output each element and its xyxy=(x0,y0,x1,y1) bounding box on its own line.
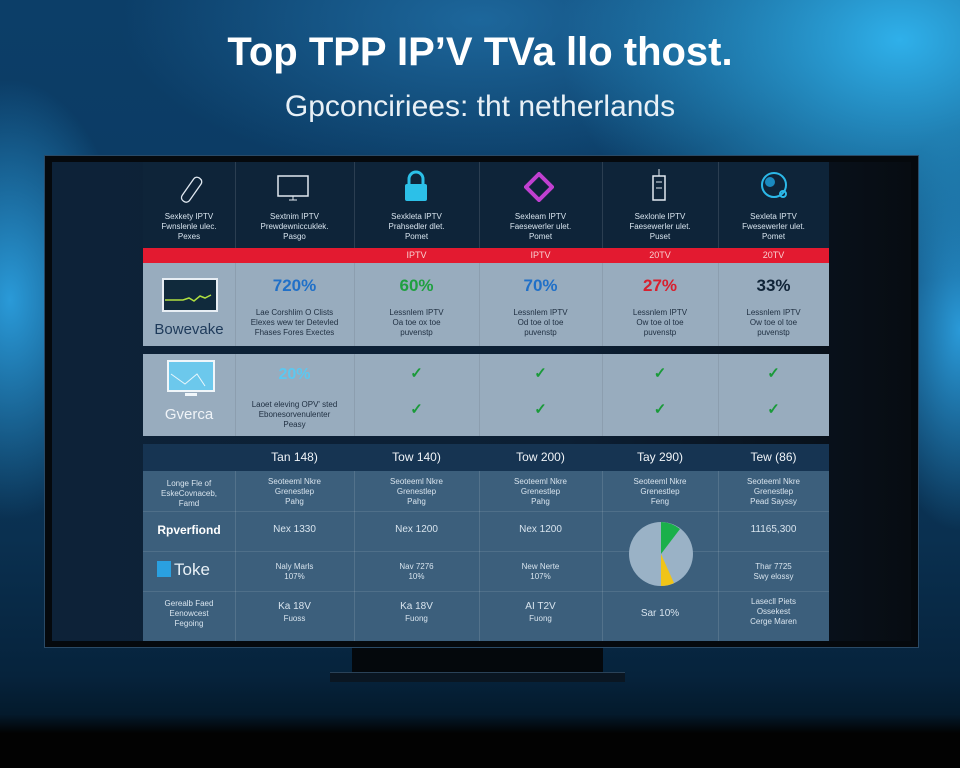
detail rows: 10% xyxy=(408,572,424,581)
header row: Pomet xyxy=(762,232,785,241)
header row: Sexleta IPTV xyxy=(750,212,797,221)
logo: Toke xyxy=(157,560,210,579)
stats row: puvenstp xyxy=(524,328,557,337)
check marks: ✓ xyxy=(534,401,547,418)
detail rows: Fuong xyxy=(529,614,552,623)
icon: monitor xyxy=(277,175,309,200)
stats row: Oa toe ox toe xyxy=(392,318,441,327)
detail rows: Pahg xyxy=(285,497,304,506)
stats row: puvenstp xyxy=(644,328,676,337)
detail rows: Pahg xyxy=(531,497,550,506)
stats row: 720% xyxy=(273,276,316,295)
header labels xyxy=(161,212,217,241)
stats row: 60% xyxy=(399,276,434,295)
tow header row xyxy=(143,444,829,471)
icon: monitor light xyxy=(167,360,215,396)
comparison table xyxy=(143,162,829,641)
detail rows: Thar 7725 xyxy=(755,562,792,571)
header row: Fwesewerler ulet. xyxy=(742,222,805,231)
detail rows: Nav 7276 xyxy=(399,562,434,571)
detail rows: Fuoss xyxy=(284,614,305,623)
stats row xyxy=(143,263,829,346)
red bar: IPTV xyxy=(406,250,426,260)
detail rows: Lasecll Piets xyxy=(751,597,796,606)
check marks: ✓ xyxy=(534,365,547,382)
header row: Sexleam IPTV xyxy=(515,212,566,221)
detail rows: Fuong xyxy=(405,614,428,623)
detail rows: Grenestlep xyxy=(397,487,436,496)
checks row xyxy=(143,354,829,436)
logo: Toke: Toke xyxy=(174,560,210,579)
tow header row: Tow 200) xyxy=(516,450,565,464)
checks row: Gverca xyxy=(165,406,213,423)
detail rows: Seoteeml Nkre xyxy=(268,477,321,486)
stats row: Elexes wew ter Detevled xyxy=(251,318,338,327)
header row xyxy=(143,162,829,248)
icon: remote xyxy=(180,176,202,203)
stats row: Fhases Fores Exectes xyxy=(255,328,334,337)
check marks: ✓ xyxy=(654,401,666,418)
detail rows: EskeCovnaceb, xyxy=(161,489,217,498)
detail rows: Feng xyxy=(651,497,669,506)
icon: tower xyxy=(652,169,666,201)
detail rows: Nex 1200 xyxy=(519,524,562,535)
tv stand xyxy=(330,648,625,682)
header labels: Sexkety IPTV xyxy=(165,212,213,221)
detail rows: Seoteeml Nkre xyxy=(390,477,443,486)
title: Top TPP IP’V TVa llo thost. xyxy=(227,30,733,74)
check marks: ✓ xyxy=(410,365,423,382)
detail rows: Nex 1200 xyxy=(395,524,438,535)
stats row: 27% xyxy=(643,276,677,295)
header row: Puset xyxy=(650,232,670,241)
detail rows: Nex 1330 xyxy=(273,524,316,535)
stats row: Lessnlem IPTV xyxy=(389,308,444,317)
header row: Pomet xyxy=(529,232,552,241)
detail rows: Rpverfiond xyxy=(157,523,221,537)
header row: Prahsedler dlet. xyxy=(388,222,445,231)
pie chart xyxy=(629,522,693,586)
check marks: ✓ xyxy=(654,365,666,382)
red bar: IPTV xyxy=(530,250,550,260)
stats row: Lessnlem IPTV xyxy=(513,308,568,317)
icon: diamond xyxy=(524,172,554,202)
stats row: Ow toe ol toe xyxy=(636,318,684,327)
stats row: 70% xyxy=(523,276,558,295)
check marks xyxy=(410,365,780,418)
stats row: puvenstp xyxy=(757,328,790,337)
header row: Pomet xyxy=(405,232,428,241)
check marks: ✓ xyxy=(767,401,780,418)
checks row: Ebonesorvenulenter xyxy=(259,410,330,419)
detail rows: Ka 18V xyxy=(400,601,433,612)
stats row: puvenstp xyxy=(400,328,433,337)
detail rows: Grenestlep xyxy=(275,487,314,496)
header row: Sextnim IPTV xyxy=(270,212,319,221)
detail rows: Swy elossy xyxy=(753,572,794,581)
detail rows: Gerealb Faed xyxy=(165,599,213,608)
check marks: ✓ xyxy=(410,401,423,418)
header row: Faesewerler ulet. xyxy=(629,222,691,231)
detail rows: Seoteeml Nkre xyxy=(747,477,800,486)
checks row: Peasy xyxy=(283,420,306,429)
stats row: Od toe ol toe xyxy=(518,318,563,327)
tow header row: Tan 148) xyxy=(271,450,318,464)
detail rows: Longe Fle of xyxy=(167,479,211,488)
screen xyxy=(52,162,911,641)
stats row: Bowevake xyxy=(154,321,224,338)
stats row: Lessnlem IPTV xyxy=(746,308,801,317)
red bar: 20TV xyxy=(649,250,671,260)
detail rows: Sar 10% xyxy=(641,608,679,619)
header row: Sexkleta IPTV xyxy=(391,212,442,221)
header row: Sexlonle IPTV xyxy=(635,212,685,221)
detail rows: Seoteeml Nkre xyxy=(634,477,686,486)
detail rows: AI T2V xyxy=(525,601,556,612)
tow header row: Tow 140) xyxy=(392,450,441,464)
icon: chart monitor xyxy=(162,278,218,312)
red bar: 20TV xyxy=(763,250,784,260)
detail rows: Ossekest xyxy=(757,607,790,616)
detail rows: Grenestlep xyxy=(521,487,560,496)
detail rows: 107% xyxy=(284,572,305,581)
detail rows: Grenestlep xyxy=(754,487,793,496)
detail rows: Pead Sayssy xyxy=(750,497,797,506)
header labels: Fwnslenle ulec. xyxy=(161,222,217,231)
tow header row: Tew (86) xyxy=(750,450,796,464)
checks row: Laoet eleving OPV' sted xyxy=(252,400,337,409)
header labels: Pexes xyxy=(178,232,200,241)
stats row: Lae Corshlim O Clists xyxy=(256,308,333,317)
detail rows: Naly Marls xyxy=(276,562,313,571)
detail rows: Pahg xyxy=(407,497,426,506)
detail rows: New Nerte xyxy=(522,562,559,571)
detail rows: Grenestlep xyxy=(640,487,680,496)
subtitle: Gpconciriees: tht netherlands xyxy=(285,90,675,123)
detail rows: 11165,300 xyxy=(751,524,796,535)
stats row: Ow toe ol toe xyxy=(750,318,797,327)
icon: globe xyxy=(761,172,787,198)
tv frame xyxy=(44,155,919,648)
detail rows: Eenowcest xyxy=(169,609,209,618)
detail rows: Fegoing xyxy=(175,619,203,628)
detail rows: Seoteeml Nkre xyxy=(514,477,567,486)
header row: Faesewerler ulet. xyxy=(510,222,571,231)
red bar xyxy=(143,248,829,263)
detail rows: 107% xyxy=(530,572,551,581)
stats row: Lessnlem IPTV xyxy=(633,308,687,317)
check marks: ✓ xyxy=(767,365,780,382)
header row: Pasgo xyxy=(283,232,306,241)
header row: Prewdewniccuklek. xyxy=(260,222,329,231)
detail rows xyxy=(143,471,829,641)
detail rows: Famd xyxy=(179,499,199,508)
detail rows: Cerge Maren xyxy=(750,617,797,626)
stats row: 33% xyxy=(756,276,791,295)
tow header row: Tay 290) xyxy=(637,450,683,464)
detail rows: Ka 18V xyxy=(278,601,311,612)
checks row: 20% xyxy=(278,366,311,383)
icon: lock xyxy=(405,170,427,201)
